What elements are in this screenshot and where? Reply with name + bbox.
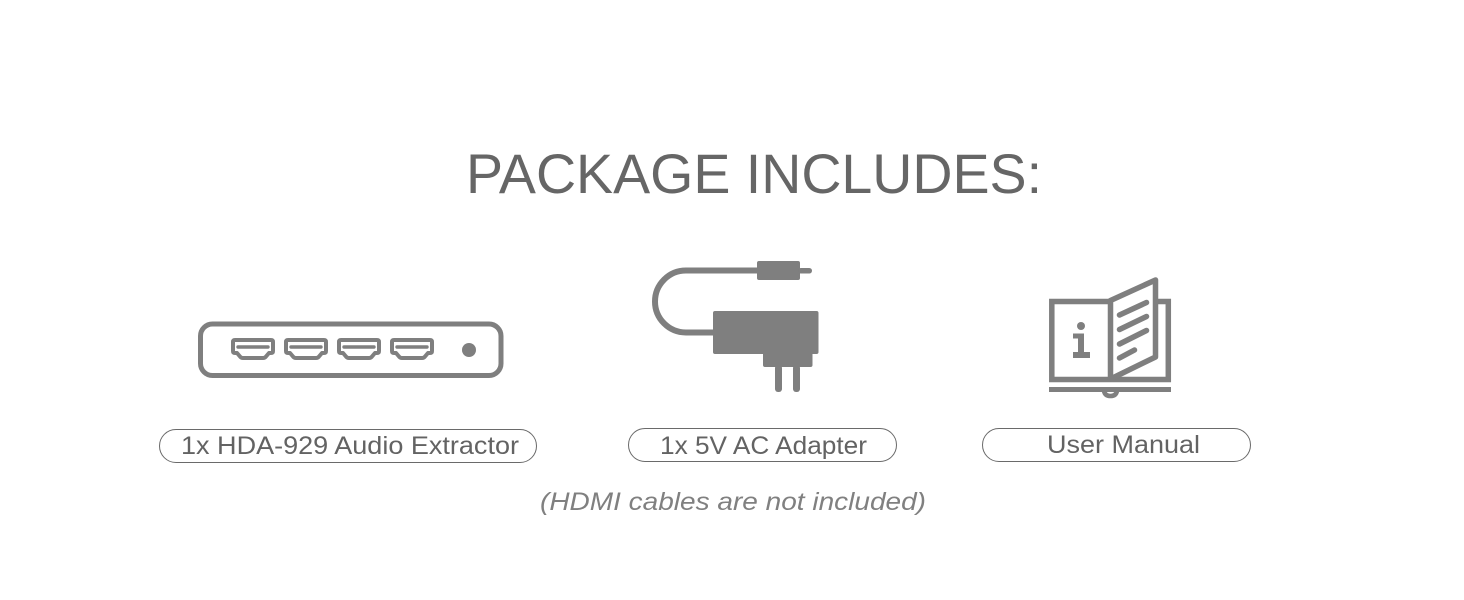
power port <box>462 343 476 357</box>
label: user manual: User Manual <box>1047 431 1200 459</box>
icon: user manual book <box>1049 280 1171 396</box>
label: AC adapter: 1x 5V AC Adapter <box>660 432 867 460</box>
HDMI ports <box>233 340 432 358</box>
icon: AC adapter <box>655 261 818 392</box>
label: AC adapter <box>628 428 896 462</box>
note: cables not included: (HDMI cables are not included) <box>540 488 926 516</box>
title: PACKAGE INCLUDES: <box>466 142 1042 205</box>
label: audio extractor: 1x HDA-929 Audio Extractor <box>181 432 519 460</box>
info symbol <box>1073 322 1090 358</box>
label: user manual <box>982 428 1250 462</box>
icon: audio extractor device <box>200 324 501 376</box>
